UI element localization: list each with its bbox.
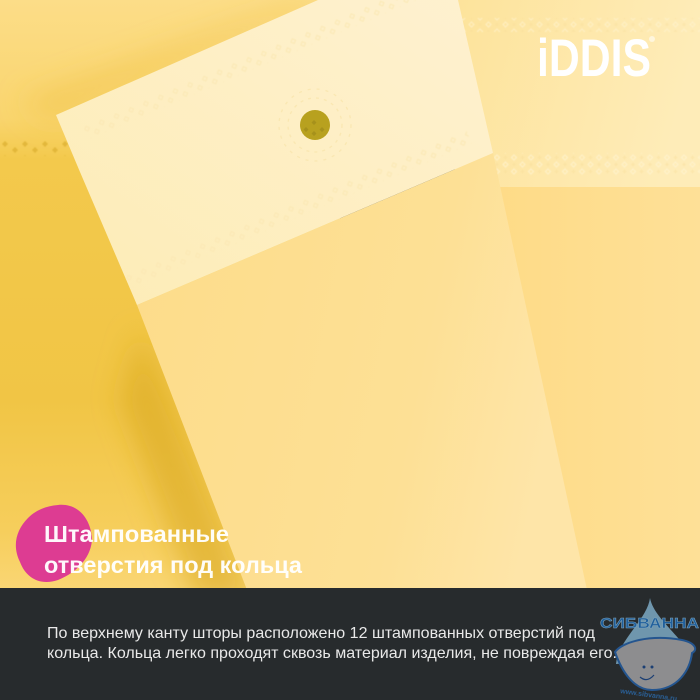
stamped strip: hem lower: [124, 131, 472, 289]
bath: [615, 638, 695, 690]
heading: Штампованные: [44, 521, 229, 547]
body text: По верхнему канту шторы расположено 12 штампованных отверстий под: [47, 625, 596, 642]
stamped strip: back left: [0, 139, 70, 156]
shadow along curtain left edge: [120, 330, 255, 600]
heading: отверстия под кольца: [44, 552, 303, 578]
shadow along curtain top edge: [20, 0, 330, 122]
water drop: [616, 598, 690, 664]
dark footer band: [0, 588, 700, 700]
stamped strip: back right lower: [494, 153, 700, 175]
background: back curtain right: [455, 0, 700, 590]
panel: front curtain: [56, 0, 587, 590]
icon: punched hole: [300, 110, 330, 140]
stamped ring around hole: [279, 89, 351, 161]
background: back curtain left: [0, 0, 340, 600]
stamped strip: hem upper: [82, 0, 474, 140]
body text: кольца. Кольца легко проходят сквозь материал изделия, не повреждая его.: [47, 645, 617, 662]
stamped strip: back right top: [462, 18, 700, 32]
curtain body: [137, 153, 587, 590]
logo: iDDIS: iDDIS: [537, 29, 651, 88]
brand name: СИБВАННА: [600, 615, 699, 632]
watermark: Sibvanna: [600, 598, 699, 700]
icon: pink blob: [16, 505, 92, 582]
curtain hem: [56, 0, 493, 305]
face: [642, 666, 646, 668]
